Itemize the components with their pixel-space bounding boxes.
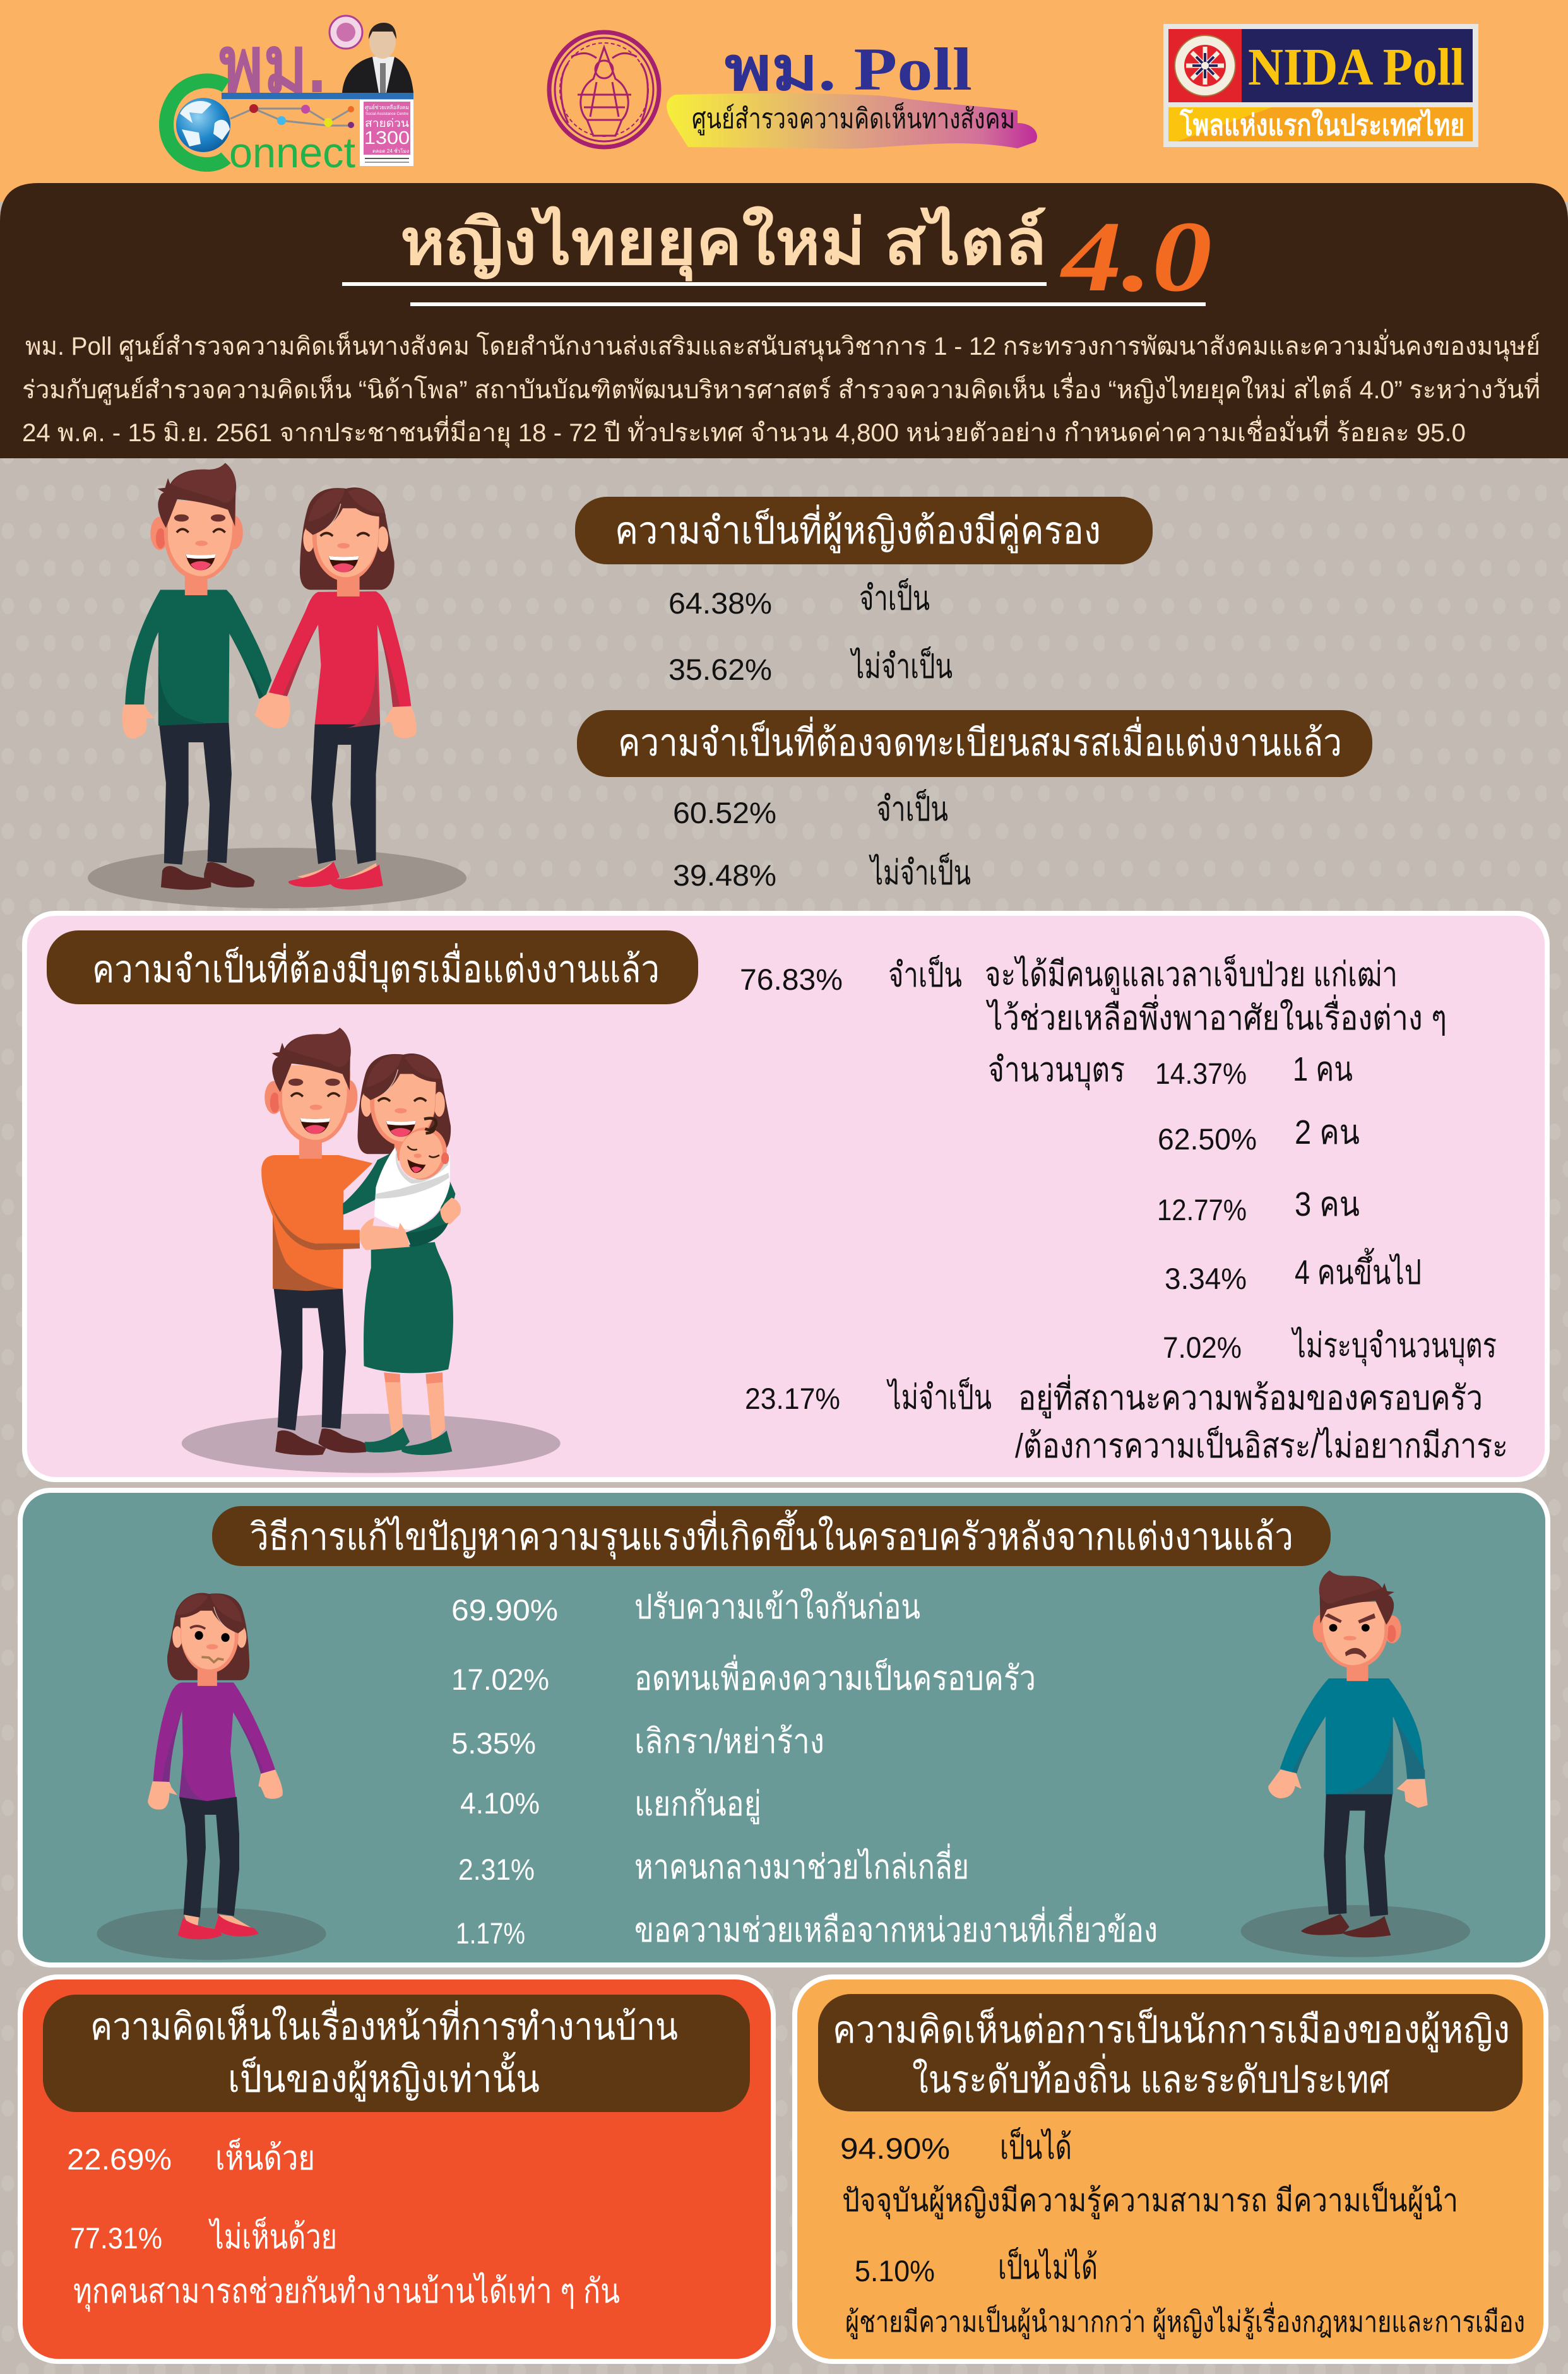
heading pill: ความคิดเห็นในเรื่องหน้าที่การทำงานบ้าน <box>90 2000 678 2048</box>
hotline card: ศูนย์ช่วยเหลือสังคม <box>365 104 409 111</box>
row: 77.31: 77.31% <box>70 2221 162 2255</box>
row: number of children 1 <box>988 1050 1353 1091</box>
woman head <box>300 487 395 596</box>
icon: globe <box>176 98 230 152</box>
พม. wordmark: พม. <box>219 20 326 109</box>
header panel <box>0 183 1568 458</box>
row: 69.90: ปรับความเข้าใจกันก่อน <box>634 1588 920 1626</box>
row: 62.50: 62.50% <box>1158 1122 1257 1156</box>
hotline card <box>360 100 413 166</box>
logo: MSDHS Connect <box>167 16 413 177</box>
row: 77.31: ไม่เห็นด้วย <box>208 2217 337 2256</box>
heading pill <box>818 1994 1523 2111</box>
intro text: ร่วมกับศูนย์สำรวจความคิดเห็น “นิด้าโพล” สถาบันบัณฑิตพัฒนบริหารศาสตร์ สำรวจความคิดเห็น เรื่อง “หญิงไทยยุคใหม่ สไตล์ 4.0” ระหว่างวันที่ <box>22 372 1540 405</box>
heading pill <box>43 1995 750 2112</box>
row: 77.31 <box>70 2217 337 2256</box>
row: 22.69: เห็นด้วย <box>215 2138 315 2177</box>
reason text <box>985 954 1447 1037</box>
title: หญิงไทยยุคใหม่ สไตล์ <box>400 206 1047 282</box>
row: 5.10: เป็นไม่ได้ <box>998 2247 1098 2286</box>
row: 22.69: 22.69% <box>67 2142 172 2176</box>
row: 23.17: อยู่ที่สถานะความพร้อมของครอบครัว <box>1018 1374 1483 1418</box>
row: 23.17: ไม่จำเป็น <box>886 1377 992 1416</box>
row: 76.83: จำเป็น <box>888 955 962 994</box>
logo: พม. Poll <box>549 32 1037 149</box>
yellow banner <box>1168 107 1473 141</box>
top banner <box>0 0 1568 202</box>
illustration: family with baby <box>182 1028 561 1473</box>
row: 5.10 <box>855 2247 1098 2288</box>
row: 39.48: 39.48% <box>673 858 776 892</box>
row: 69.90: 69.90% <box>451 1593 558 1627</box>
mother dress <box>343 1152 453 1455</box>
row: 94.90: 94.90% <box>840 2132 950 2165</box>
panel: women in politics <box>795 1977 1546 2361</box>
intro text: พม. Poll ศูนย์สำรวจความคิดเห็นทางสังคม โดยสำนักงานส่งเสริมและสนับสนุนวิชาการ 1 - 12 กระทรวงการพัฒนาสังคมและความมั่นคงของมนุษย์ <box>25 329 1540 362</box>
heading pill <box>47 930 698 1004</box>
row: number of children 1: 1 คน <box>1293 1050 1353 1088</box>
row: 2.31 <box>458 1843 969 1886</box>
mother head <box>358 1053 451 1161</box>
row: 35.62: 35.62% <box>668 653 772 686</box>
row: 3.34 <box>1165 1248 1422 1295</box>
row: 64.38 <box>668 578 930 620</box>
worried head <box>167 1593 249 1686</box>
row: 5.35: 5.35% <box>451 1726 536 1760</box>
hotline card: ตลอด 24 ชั่วโมง <box>372 147 409 154</box>
panel: domestic violence <box>20 1490 1548 1965</box>
row: 64.38: 64.38% <box>668 586 772 620</box>
panel: housework <box>20 1977 773 2361</box>
man body <box>122 590 271 890</box>
row: 7.02: ไม่ระบุจำนวนบุตร <box>1291 1326 1497 1367</box>
tagline: ศูนย์สำรวจความคิดเห็นทางสังคม <box>692 102 1015 136</box>
heading pill: ในระดับท้องถิ่น และระดับประเทศ <box>912 2053 1390 2101</box>
row: 3.34: 4 คนขึ้นไป <box>1295 1248 1422 1291</box>
row: 12.77 <box>1157 1185 1360 1226</box>
heading pill: registration <box>577 710 1372 777</box>
icon: minister portrait <box>342 23 413 93</box>
hotline card: 1300 <box>364 128 410 148</box>
row: 62.50 <box>1158 1113 1360 1156</box>
heading pill: เป็นของผู้หญิงเท่านั้น <box>228 2051 540 2102</box>
reason text: ไว้ช่วยเหลือพึ่งพาอาศัยในเรื่องต่าง ๆ <box>986 994 1447 1037</box>
heading pill: registration: ความจำเป็นที่ต้องจดทะเบียนสมรสเมื่อแต่งงานแล้ว <box>618 716 1342 764</box>
network graph <box>230 104 354 128</box>
row: 62.50: 2 คน <box>1295 1113 1360 1151</box>
row: 1.17: ขอความช่วยเหลือจากหน่วยงานที่เกี่ยวข้อง <box>634 1906 1158 1949</box>
note: ปัจจุบันผู้หญิงมีความรู้ความสามารถ มีความเป็นผู้นำ <box>842 2181 1458 2219</box>
row: number of children 1: จำนวนบุตร <box>988 1051 1125 1091</box>
icon: ministry seal <box>549 32 659 147</box>
row: 1.17: 1.17% <box>456 1916 525 1950</box>
heading pill: partner: ความจำเป็นที่ผู้หญิงต้องมีคู่ครอง <box>615 504 1101 554</box>
row: 7.02: 7.02% <box>1163 1331 1242 1364</box>
heading pill <box>212 1506 1331 1566</box>
row: 4.10: แยกกันอยู่ <box>634 1785 761 1824</box>
row: 39.48 <box>673 853 971 892</box>
row: 35.62: ไม่จำเป็น <box>850 646 953 685</box>
note: ทุกคนสามารถช่วยกันทำงานบ้านได้เท่า ๆ กัน <box>73 2272 620 2312</box>
intro text: 24 พ.ค. - 15 มิ.ย. 2561 จากประชาชนที่มีอายุ 18 - 72 ปี ทั่วประเทศ จำนวน 4,800 หน่วยตัวอย่าง กำหนดค่าความเชื่อมั่นที่ ร้อยละ 95.0 <box>22 415 1466 448</box>
row: 5.35: เลิกรา/หย่าร้าง <box>634 1723 824 1760</box>
row: 2.31: หาคนกลางมาช่วยไกล่เกลี่ย <box>634 1843 969 1886</box>
wordmark: พม. Poll <box>725 35 972 103</box>
row: 76.83 <box>740 955 962 996</box>
heading pill: ความคิดเห็นต่อการเป็นนักการเมืองของผู้หญิง <box>833 2007 1510 2053</box>
row: 23.17 <box>745 1374 1508 1465</box>
heading pill: ความจำเป็นที่ต้องมีบุตรเมื่อแต่งงานแล้ว <box>92 943 660 992</box>
row: 60.52 <box>673 789 948 829</box>
row: 76.83: 76.83% <box>740 963 843 996</box>
row: 23.17: 23.17% <box>745 1382 840 1415</box>
row: 22.69 <box>67 2138 315 2177</box>
row: 17.02 <box>451 1654 1036 1697</box>
banner text: โพลแห่งแรกในประเทศไทย <box>1179 108 1464 141</box>
hotline card: Social Assistance Centre <box>365 112 409 116</box>
reason text: จะได้มีคนดูแลเวลาเจ็บป่วย แก่เฒ่า <box>985 954 1398 995</box>
logo: NIDA Poll <box>1163 24 1478 147</box>
blue bar <box>222 93 413 99</box>
angry head <box>1313 1570 1401 1681</box>
illustration: happy couple <box>88 463 466 908</box>
illustration: angry man <box>1241 1570 1470 1957</box>
icon: seal <box>330 16 362 49</box>
illustration: worried woman <box>97 1593 326 1960</box>
baby in blanket <box>374 1118 455 1247</box>
panel: children <box>25 913 1547 1480</box>
row: 64.38: จำเป็น <box>859 578 930 617</box>
title 4.0: 4.0 <box>1059 200 1212 312</box>
brush stroke <box>667 93 1037 149</box>
woman body <box>255 591 417 889</box>
row: 5.35 <box>451 1723 824 1760</box>
Connect C <box>167 81 226 165</box>
row: 4.10: 4.10% <box>460 1786 540 1820</box>
hands <box>360 1197 461 1250</box>
heading pill: วิธีการแก้ไขปัญหาความรุนแรงที่เกิดขึ้นในครอบครัวหลังจากแต่งงานแล้ว <box>250 1509 1293 1560</box>
row: 12.77: 12.77% <box>1157 1193 1247 1226</box>
heading pill: partner <box>575 497 1153 564</box>
father body <box>261 1155 372 1455</box>
row: 3.34: 3.34% <box>1165 1262 1247 1295</box>
intro text <box>22 329 1540 448</box>
row: 12.77: 3 คน <box>1295 1185 1360 1223</box>
row: 39.48: ไม่จำเป็น <box>869 853 971 892</box>
icon: NIDA emblem <box>1175 35 1235 96</box>
row: 7.02 <box>1163 1326 1497 1367</box>
row: 4.10 <box>460 1785 761 1824</box>
row: 60.52: จำเป็น <box>876 789 948 828</box>
row: 60.52: 60.52% <box>673 796 776 829</box>
row: 2.31: 2.31% <box>458 1853 535 1886</box>
row: 94.90 <box>840 2127 1072 2166</box>
row: 1.17 <box>456 1906 1158 1950</box>
title underlines <box>342 282 1206 306</box>
row: 17.02: อดทนเพื่อคงความเป็นครอบครัว <box>634 1654 1036 1697</box>
row: 5.10: 5.10% <box>855 2254 935 2288</box>
row: 17.02: 17.02% <box>451 1663 549 1696</box>
row: 69.90 <box>451 1588 920 1627</box>
row: 35.62 <box>668 646 953 686</box>
father head <box>264 1028 357 1159</box>
row: 94.90: เป็นได้ <box>1000 2127 1072 2166</box>
man head <box>150 463 243 595</box>
row: number of children 1: 14.37% <box>1155 1057 1247 1090</box>
NIDA Poll wordmark: NIDA Poll <box>1248 38 1464 97</box>
Connect text: onnect <box>229 129 355 177</box>
hotline card: สายด่วน <box>365 117 409 129</box>
